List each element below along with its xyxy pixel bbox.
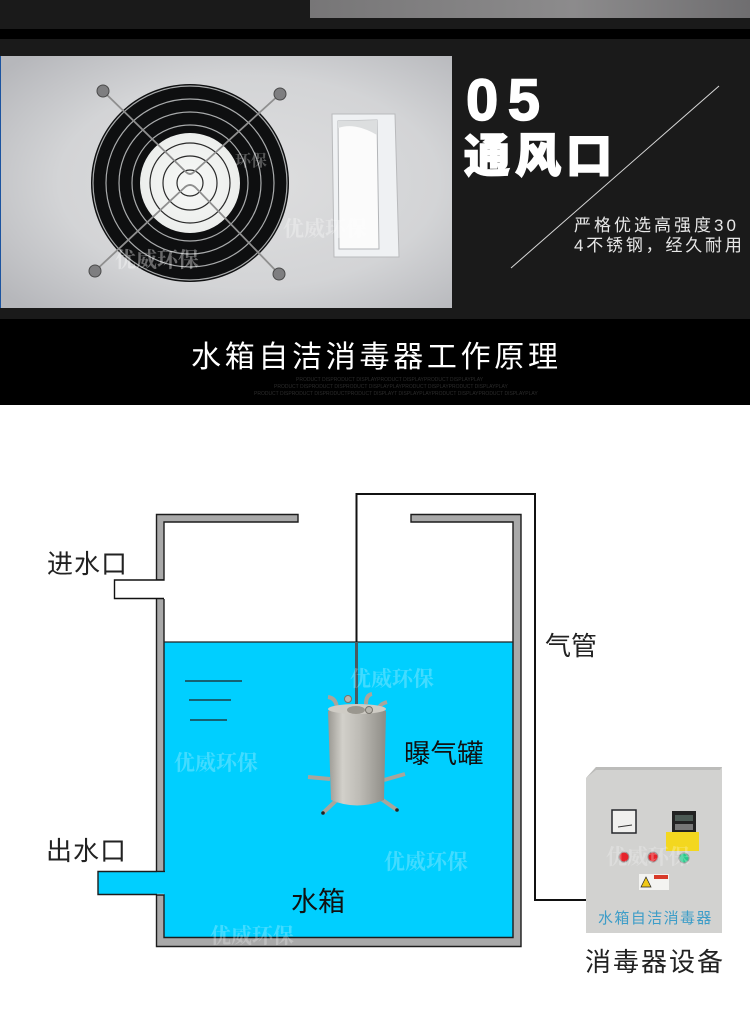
hazard label bbox=[639, 874, 669, 890]
subtitle microtext bbox=[254, 377, 538, 397]
yellow warning label bbox=[666, 832, 699, 851]
top dark band bbox=[0, 0, 750, 320]
title: 水箱自洁消毒器工作原理 bbox=[191, 341, 562, 374]
watermark: 优威环保 bbox=[115, 248, 199, 272]
label: air pipe: 气管 bbox=[545, 631, 597, 661]
watermarks on diagram: 优威环保 bbox=[210, 924, 294, 948]
white diagram background bbox=[0, 405, 750, 1016]
box caption: 水箱自洁消毒器 bbox=[598, 910, 713, 927]
icon: disinfector control box bbox=[586, 767, 722, 933]
label: aeration tank: 曝气罐 bbox=[404, 739, 484, 769]
text block: material note: 4不锈钢，经久耐用 bbox=[574, 236, 745, 255]
outlet pipe bbox=[98, 872, 165, 894]
label: inlet: 进水口 bbox=[47, 549, 128, 579]
subtitle microtext: PRODUCT DISPRODUCT DISPRODUCTPRODUCT DISPLAYT DISPLAYPLAYPRODUCT DISPLAYPRODUCT DISPLAYPLAY bbox=[254, 391, 538, 397]
subtitle microtext: PRODUCT DISPRODUCT DISPRODUCT DISPLAYPLAYPRODUCT DISPLAYPRODUCT DISPLAYPLAY bbox=[274, 384, 509, 390]
indicator lights bbox=[619, 852, 689, 863]
text block: material note bbox=[574, 216, 745, 255]
label: outlet: 出水口 bbox=[46, 836, 127, 866]
watermarks on diagram: 优威环保 bbox=[384, 850, 468, 874]
subtitle microtext: PRODUCT DISPRODUCT DISPLAYPRODUCT DISPLAYPRODUCT DISPLAYPLAY bbox=[296, 377, 484, 383]
icon: fan with wire guard bbox=[89, 84, 289, 282]
diagram: water tank bbox=[98, 514, 521, 946]
water bbox=[164, 642, 513, 938]
watermarks on diagram: 优威环保 bbox=[174, 751, 258, 775]
watermarks on diagram bbox=[174, 667, 690, 948]
air pipe bbox=[356, 494, 592, 900]
diagonal line bbox=[511, 86, 719, 268]
panel: ventilation photo bbox=[0, 56, 452, 308]
title band bbox=[0, 319, 750, 405]
icon: aeration tank bbox=[308, 694, 405, 815]
text block: material note: 严格优选高强度30 bbox=[574, 216, 739, 235]
inlet pipe bbox=[114, 580, 164, 598]
water surface bbox=[164, 641, 513, 643]
heading: ventilation: 通风口 bbox=[464, 130, 617, 182]
tank walls bbox=[156, 514, 298, 580]
digital controller bbox=[672, 811, 696, 833]
watermarks on diagram: 优威环保 bbox=[350, 667, 434, 691]
watermark: 环保 bbox=[235, 151, 267, 170]
label: water tank: 水箱 bbox=[291, 887, 345, 917]
heading: 05: 05 bbox=[466, 68, 540, 133]
water level marks bbox=[185, 681, 242, 720]
ammeter bbox=[612, 810, 636, 833]
icon: white vent handle bbox=[332, 114, 399, 257]
watermarks on diagram: 优威环保 bbox=[606, 845, 690, 869]
watermark: 优威环保 bbox=[283, 217, 367, 241]
label: disinfection equipment: 消毒器设备 bbox=[585, 947, 725, 977]
